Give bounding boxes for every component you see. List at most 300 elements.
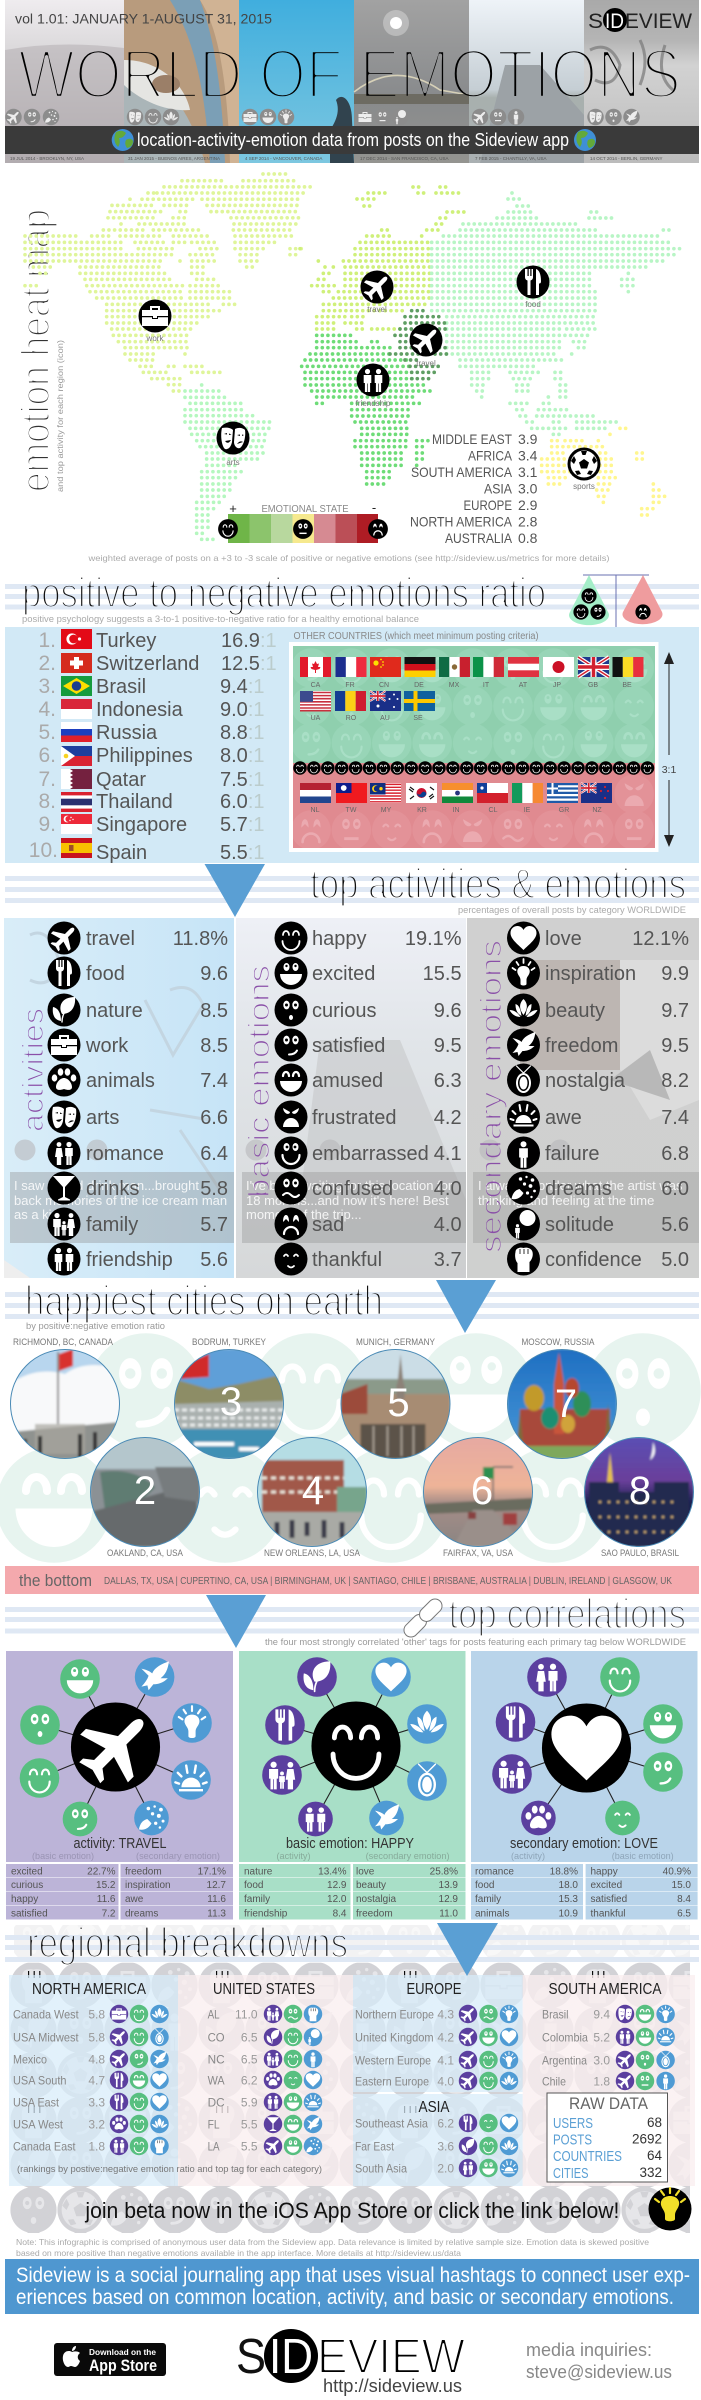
table: north america (13, 1981, 169, 2155)
table: europe: United Kingdom (355, 2030, 434, 2044)
top ten country ranking: 2. (38, 652, 56, 675)
top ten country ranking: 6.0:1 (220, 791, 264, 813)
table: love: happy (590, 1866, 618, 1878)
region score list: 3.9 (518, 431, 538, 447)
top ten country ranking: Russia (96, 722, 158, 744)
table: north america: 1.8 (88, 2140, 105, 2154)
photo strips (5, 0, 699, 163)
table: united states: 11.0 (235, 2008, 258, 2022)
top ten country ranking: 8.8:1 (220, 722, 264, 744)
app store badge: App Store (89, 2356, 157, 2375)
logo top right: ID (605, 10, 624, 33)
emotional state legend: - (372, 500, 376, 515)
region score list: MIDDLE EAST (432, 431, 512, 447)
table: happy: love (356, 1866, 375, 1878)
list: activities: nature (86, 1000, 143, 1022)
top ten country ranking: 10. (29, 839, 58, 862)
list: activities: friendship (86, 1249, 173, 1271)
panel: basic emotions: I've been waiting for this location for (246, 1178, 453, 1193)
flags above 3:1: SE (413, 715, 423, 722)
panel: travel: (secondary emotion) (136, 1851, 220, 1862)
dark tagline bar (5, 126, 699, 154)
list: secondary emotions: 9.9 (661, 963, 689, 985)
list: secondary emotions: freedom (545, 1035, 618, 1057)
panel: travel: activity: TRAVEL (74, 1836, 166, 1852)
data note: based on more positive than negative emotions available in the app interface. More details at http://sideview.us/data (16, 2248, 461, 2258)
map marker: travel middle east (408, 321, 445, 368)
raw data box: 68 (647, 2115, 662, 2130)
table: asia: ASIA (418, 2099, 450, 2116)
table: south america: 1.8 (593, 2074, 610, 2088)
tagline text: location-activity-emotion data from posts on the Sideview app (137, 130, 569, 150)
panel: happy: basic emotion: HAPPY (286, 1836, 414, 1852)
subheading: the four most strongly correlated 'other' tags for posts featuring each primary tag below WORLDWIDE (265, 1637, 686, 1648)
map marker: friendship (356, 364, 391, 408)
table: north america: Canada East (13, 2140, 76, 2154)
table: north america: USA West (13, 2118, 64, 2132)
media inquiries: steve@sideview.us (526, 2362, 672, 2382)
arrow down (437, 1923, 498, 1976)
dot map: africa (302, 335, 432, 484)
map marker: work: work (146, 334, 164, 343)
small grey tag icons (4, 108, 640, 126)
list: basic emotions: 4.1 (434, 1143, 462, 1165)
list: activities: 7.4 (200, 1070, 228, 1092)
list: activities: 6.6 (200, 1107, 228, 1129)
list: activities (46, 919, 228, 1276)
map marker: arts: arts (226, 458, 240, 467)
website url: http://sideview.us (323, 2376, 462, 2396)
list: activities: 5.6 (200, 1249, 228, 1271)
top ten country ranking: 6. (38, 744, 56, 767)
table: south america: Argentina (542, 2054, 587, 2068)
table: united states: 6.5 (241, 2052, 258, 2066)
raw data box (547, 2093, 668, 2182)
emotional state legend (218, 500, 388, 543)
list: basic emotions: curious (312, 1000, 376, 1022)
list: activities: food (86, 963, 125, 985)
list: secondary emotions: 9.7 (661, 1000, 689, 1022)
panel: love (471, 1651, 698, 1862)
list: secondary emotions: love (545, 928, 582, 950)
raw data box: 64 (647, 2148, 662, 2163)
top ten country ranking: Spain (96, 842, 147, 864)
vertical label: basic emotions: basic emotions (243, 965, 276, 1198)
sideview logo (236, 2329, 466, 2384)
table: united states: NC (208, 2052, 225, 2066)
map marker: travel europe: travel (367, 305, 387, 314)
stripes (5, 1938, 699, 1960)
table: south america: Chile (542, 2074, 566, 2088)
flags below 3:1 (300, 783, 612, 814)
pale background faces (0, 1333, 701, 1563)
table: happy: 13.4% (318, 1866, 347, 1878)
list: activities: 6.4 (200, 1143, 228, 1165)
list: secondary emotions: solitude (545, 1214, 614, 1236)
table: love: 6.5 (677, 1908, 691, 1920)
top ten country ranking: Brasil (96, 676, 146, 698)
list: secondary emotions: 12.1% (632, 928, 689, 950)
heading: positive to negative emotions ratio (22, 569, 546, 616)
table: travel: 15.2 (96, 1880, 116, 1891)
city photo: Oakland: 2 (134, 1469, 156, 1513)
top ten country ranking: Switzerland (96, 653, 199, 675)
list: basic emotions: 6.3 (434, 1070, 462, 1092)
city photo: New Orleans (257, 1437, 367, 1547)
app store badge (54, 2343, 166, 2376)
city labels top: RICHMOND, BC, CANADA (13, 1337, 114, 1348)
table: europe: 4.2 (437, 2030, 454, 2044)
list: basic emotions: satisfied (312, 1035, 385, 1057)
list: secondary emotions: 7.4 (661, 1107, 689, 1129)
table: travel: dreams (125, 1908, 158, 1920)
table: love: food (475, 1880, 494, 1891)
list: secondary emotions: nostalgia (545, 1070, 626, 1092)
photo captions: 31 JAN 2015 - BUENOS AIRES, ARGENTINA (128, 156, 220, 161)
region score list: EUROPE (464, 497, 512, 513)
table: united states: 6.2 (241, 2074, 258, 2088)
top ten country ranking: 5.7:1 (220, 814, 264, 836)
top ten country ranking: 5.5:1 (220, 842, 264, 864)
flags above 3:1: CN (379, 682, 389, 689)
photo captions: 7 FEB 2015 - CHANTILLY, VA, USA (475, 156, 547, 161)
region score list: 0.8 (518, 530, 538, 546)
table: europe: EUROPE (406, 1981, 462, 1998)
table: happy: 12.9 (327, 1880, 347, 1891)
city labels bottom: FAIRFAX, VA, USA (443, 1548, 514, 1559)
table: love: 8.4 (677, 1894, 691, 1905)
other countries label: OTHER COUNTRIES (which meet minimum posting criteria) (294, 631, 538, 642)
top correlations section (5, 1590, 699, 1920)
other countries box (289, 642, 658, 852)
flags above 3:1: GB (588, 682, 598, 689)
list: basic emotions (274, 922, 462, 1276)
flags above 3:1: AT (519, 682, 528, 689)
top ten country ranking: 8. (38, 790, 56, 813)
faint icon circles row behind heading (14, 1925, 690, 1963)
table: happy: 12.0 (327, 1894, 347, 1905)
table: travel (6, 1864, 233, 1920)
table: europe: 4.1 (437, 2054, 454, 2068)
list: secondary emotions (507, 922, 689, 1276)
city photo: Munich: 5 (387, 1381, 410, 1425)
table: south america: 9.4 (593, 2008, 610, 2022)
city photo: Fairfax: 6 (471, 1469, 493, 1513)
list: basic emotions: 4.0 (434, 1214, 462, 1236)
heading: regional breakdowns (27, 1919, 348, 1966)
table: travel: happy (11, 1894, 38, 1905)
media inquiries (526, 2340, 672, 2382)
table: love: family (475, 1894, 501, 1905)
list: activities: family (86, 1214, 138, 1236)
top ten country ranking: Philippines (96, 745, 193, 767)
table: united states: AL (208, 2008, 220, 2022)
table: happy: family (244, 1894, 270, 1905)
table: travel: satisfied (11, 1908, 48, 1920)
region score list: 3.4 (518, 448, 538, 464)
list: activities: arts (86, 1107, 119, 1129)
table: love: satisfied (590, 1894, 627, 1905)
panel: secondary emotions: thinking and feeling at the time (478, 1193, 654, 1208)
raw data box: CITIES (553, 2166, 588, 2182)
top ten country ranking: Qatar (96, 769, 146, 791)
table: north america: 4.8 (88, 2052, 105, 2066)
table: happy: food (244, 1880, 263, 1891)
photo captions: 14 OCT 2014 - BERLIN, GERMANY (590, 156, 662, 161)
flags above 3:1: MX (449, 682, 460, 689)
dot map: asia (432, 193, 682, 434)
city photo: New Orleans: 4 (302, 1469, 324, 1513)
arrow: 3:1 scale (662, 652, 676, 847)
region score list: SOUTH AMERICA (411, 464, 513, 480)
map marker: sports (568, 448, 600, 491)
list: basic emotions: 15.5 (423, 963, 462, 985)
table: happy: 25.8% (430, 1866, 458, 1878)
table: love: 40.9% (663, 1866, 691, 1878)
table: happy: 8.4 (333, 1908, 347, 1920)
list: basic emotions: 9.6 (434, 1000, 462, 1022)
city labels bottom: NEW ORLEANS, LA, USA (264, 1548, 361, 1559)
top ten country ranking: 9.0:1 (220, 699, 264, 721)
list: activities: 5.7 (200, 1214, 228, 1236)
photo captions: 19 JUL 2014 - BROOKLYN, NY, USA (10, 156, 84, 161)
flags below 3:1: IE (524, 807, 531, 814)
heading: happiest cities on earth (25, 1277, 383, 1324)
raw data box: 332 (639, 2165, 662, 2180)
top ten country ranking: 12.5:1 (221, 653, 277, 675)
table: travel: awe (125, 1894, 144, 1905)
panel: basic emotions: 18 months...and now it's here! Best (246, 1193, 449, 1208)
map marker: food: food (525, 300, 541, 309)
table: north america: 3.3 (88, 2096, 105, 2110)
table: happy: nature (244, 1866, 273, 1878)
table: travel: 22.7% (87, 1866, 116, 1878)
subheading: percentages of overall posts by category WORLDWIDE (458, 905, 686, 915)
map footnote: weighted average of posts on a +3 to -3 scale of positive or negative emotions (see http://sideview.us/metrics for more details) (87, 553, 610, 563)
sideview logo: ID (269, 2330, 313, 2384)
emotion heat map section (14, 174, 682, 563)
table: travel: 11.6 (207, 1894, 226, 1905)
faces row at 3:1 line (293, 761, 654, 775)
table: love: romance (475, 1866, 514, 1878)
table: asia: Far East (355, 2140, 395, 2154)
list: basic emotions: sad (312, 1214, 344, 1236)
list: basic emotions: 9.5 (434, 1035, 462, 1057)
table: happy (239, 1864, 466, 1920)
table: united states: FL (208, 2118, 220, 2132)
city photo: Moscow (507, 1349, 617, 1459)
table: love: animals (475, 1908, 509, 1920)
city labels bottom: SAO PAULO, BRASIL (601, 1548, 679, 1559)
ratio section (5, 569, 699, 864)
list: secondary emotions: 9.5 (661, 1035, 689, 1057)
arrow down (204, 864, 265, 917)
map marker: work (138, 300, 172, 343)
top ten country ranking: Turkey (96, 630, 156, 652)
list: secondary emotions: awe (545, 1107, 582, 1129)
list: secondary emotions: dreams (545, 1178, 612, 1200)
table: south america: Brasil (542, 2008, 568, 2022)
photo captions: 4 SEP 2014 - VANCOUVER, CANADA (245, 156, 322, 161)
happiest cities section (0, 1277, 701, 1594)
city photo: Oakland (90, 1437, 200, 1547)
table: love: 15.3 (559, 1894, 578, 1905)
city photo: Moscow: 7 (555, 1382, 577, 1426)
list: secondary emotions: confidence (545, 1249, 642, 1271)
photo captions (10, 156, 662, 161)
city labels top: MUNICH, GERMANY (356, 1337, 436, 1348)
subheading: by positive:negative emotion ratio (26, 1321, 165, 1332)
top ten country ranking: 8.0:1 (220, 745, 264, 767)
panel: happy (239, 1651, 466, 1862)
stripes (5, 586, 699, 607)
top ten country ranking: 7. (38, 768, 56, 791)
stripes (5, 878, 699, 900)
region score list (410, 431, 538, 546)
list: activities: 9.6 (200, 963, 228, 985)
table: travel: freedom (125, 1866, 162, 1878)
list: activities: 11.8% (173, 928, 228, 950)
city labels bottom: OAKLAND, CA, USA (107, 1548, 184, 1559)
list: activities: 5.8 (200, 1178, 228, 1200)
vertical heading: emotion heat map (14, 209, 58, 492)
table: south america: 3.0 (593, 2054, 610, 2068)
vertical label: activities: activities (17, 1008, 50, 1132)
data note: Note: This infographic is comprised of anonymous user data from the Sideview app. Data relevance is limited by relative sample size. Emotion data is skewed positive (16, 2237, 649, 2247)
flags above 3:1: AU (380, 715, 390, 722)
map marker: friendship: friendship (356, 399, 391, 408)
panel: basic emotions: moment of the trip... (246, 1207, 362, 1222)
raw data box: 2692 (632, 2132, 662, 2146)
list: basic emotions: 3.7 (434, 1249, 462, 1271)
list: secondary emotions: failure (545, 1143, 599, 1165)
map marker: travel europe (359, 268, 396, 314)
rankings note: (rankings by postive:negative emotion ratio and top tag for each category) (17, 2163, 322, 2174)
city photo: Richmond (10, 1349, 120, 1459)
arrow down (206, 1595, 266, 1648)
table: north america: 4.7 (88, 2074, 105, 2088)
panel: secondary emotions: I always wonder what the artist was (478, 1178, 683, 1193)
region score list: AUSTRALIA (445, 530, 513, 546)
city photo: Bodrum: 3 (220, 1380, 242, 1424)
table: love: excited (590, 1880, 622, 1891)
top ten country ranking: Singapore (96, 814, 187, 836)
list: basic emotions: confused (312, 1178, 393, 1200)
panel: activities (4, 918, 234, 1278)
table: travel: 11.3 (207, 1908, 226, 1920)
region score list: NORTH AMERICA (410, 514, 513, 530)
region score list: ASIA (484, 481, 513, 497)
table: love: 10.9 (559, 1908, 578, 1920)
panel: love: (basic emotion) (612, 1851, 674, 1862)
region score list: 2.8 (518, 514, 538, 530)
flags below 3:1: KR (417, 807, 427, 814)
table: asia: 2.0 (437, 2162, 454, 2176)
media inquiries: media inquiries: (526, 2340, 652, 2360)
table: north america: USA South (13, 2074, 66, 2088)
the bottom band: the bottom (19, 1571, 92, 1590)
globe right (574, 129, 596, 151)
table: asia: 3.6 (437, 2140, 454, 2154)
flags below 3:1: CL (489, 807, 498, 814)
table: united states: CO (208, 2030, 225, 2044)
list: basic emotions: amused (312, 1070, 383, 1092)
region score list: 2.9 (518, 497, 538, 513)
panel: basic emotions (236, 918, 466, 1278)
flags above 3:1 (300, 657, 644, 722)
table: north america: NORTH AMERICA (32, 1981, 147, 1998)
table: travel: curious (11, 1880, 43, 1891)
panel: activities: as a kid (14, 1207, 59, 1222)
dot map: europe (300, 187, 465, 329)
sideview logo: S (236, 2330, 266, 2384)
arrow: 3:1 scale: 3:1 (662, 764, 676, 776)
tinted column panels (9, 1975, 695, 2186)
top ten country ranking: 3. (38, 675, 56, 698)
panel: love: secondary emotion: LOVE (510, 1836, 658, 1852)
list: secondary emotions: beauty (545, 1000, 605, 1022)
table: travel: 17.1% (198, 1866, 226, 1878)
city photo: Munich (340, 1349, 450, 1459)
sideview logo: EVIEW (317, 2330, 466, 2384)
city photo: Bodrum (174, 1349, 284, 1459)
table: united states: UNITED STATES (213, 1981, 315, 1998)
table: united states: WA (208, 2074, 225, 2088)
dot map: middle east (390, 311, 448, 379)
table: asia: Southeast Asia (355, 2116, 428, 2130)
list: activities: romance (86, 1143, 164, 1165)
volume line: vol 1.01: JANUARY 1-AUGUST 31, 2015 (15, 10, 272, 26)
table: love: 15.0 (672, 1880, 691, 1891)
top ten country ranking: 16.9:1 (221, 630, 277, 652)
list: secondary emotions: 6.0 (661, 1178, 689, 1200)
table: love (471, 1864, 698, 1920)
vertical subheading: and top activity for each region (icon) (55, 340, 65, 492)
flags below 3:1: GR (559, 807, 569, 814)
the bottom band (5, 1566, 699, 1594)
table: north america: Canada West (13, 2008, 79, 2022)
table: happy: friendship (244, 1908, 288, 1920)
flags above 3:1: RO (346, 715, 357, 722)
dot map: australia (542, 428, 667, 515)
raw data box: COUNTRIES (553, 2149, 622, 2165)
table: united states: 5.5 (241, 2118, 258, 2132)
top ten country ranking: Thailand (96, 791, 173, 813)
city labels top: MOSCOW, RUSSIA (522, 1337, 595, 1348)
table: love: 18.0 (559, 1880, 578, 1891)
flags above 3:1: DE (414, 682, 424, 689)
balance scale icon (569, 575, 662, 641)
top ten country ranking: 7.5:1 (220, 769, 264, 791)
table: united states: LA (208, 2140, 220, 2154)
chain icon (401, 1596, 445, 1640)
table: united states: DC (208, 2096, 225, 2110)
top ten country ranking: 4. (38, 698, 56, 721)
table: south america: 5.2 (593, 2030, 610, 2044)
list: basic emotions: frustrated (312, 1107, 396, 1129)
globe left (112, 129, 134, 151)
top ten country ranking: 9.4:1 (220, 676, 264, 698)
list: basic emotions: thankful (312, 1249, 382, 1271)
emotional state legend: EMOTIONAL STATE (262, 504, 349, 515)
table: united states: 5.9 (241, 2096, 258, 2110)
panel: secondary emotions (467, 918, 699, 1278)
panel: love: (activity) (511, 1851, 545, 1862)
list: basic emotions: excited (312, 963, 375, 985)
flags above 3:1: BE (622, 682, 632, 689)
logo top right (588, 8, 692, 33)
flags above 3:1: CA (311, 682, 321, 689)
